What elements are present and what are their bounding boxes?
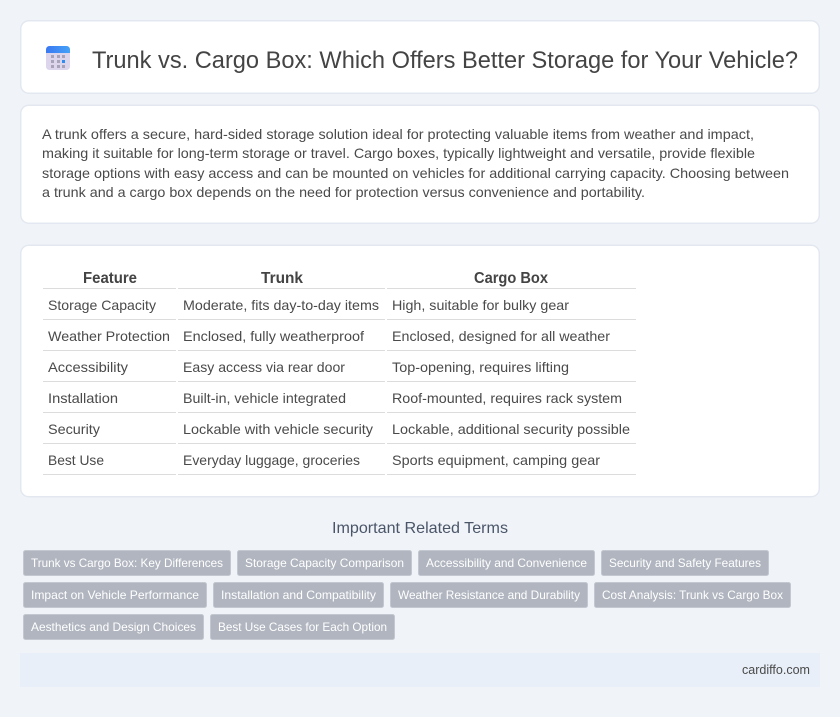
- tag: Impact on Vehicle Performance: [31, 588, 199, 602]
- tag: Storage Capacity Comparison: [245, 556, 404, 570]
- table header: Trunk: [261, 270, 303, 287]
- text block: introduction: A trunk offers a secure, hard-sided storage solution ideal for protecting valuable items from weather and impact,: [42, 126, 754, 142]
- row: storage capacity: High, suitable for bulky gear: [392, 297, 569, 313]
- table header: Cargo Box: [474, 270, 548, 287]
- tag: [594, 582, 790, 608]
- tag: Accessibility and Convenience: [426, 556, 587, 570]
- panel: header: [21, 21, 819, 93]
- row: storage capacity: Storage Capacity: [48, 297, 156, 313]
- tag: [418, 550, 594, 576]
- tag: [214, 582, 384, 608]
- tag: [24, 614, 204, 640]
- row: best use: Best Use: [48, 452, 104, 468]
- icon: calendar: [46, 46, 70, 70]
- text block: introduction: [42, 126, 789, 200]
- text block: introduction: storage options with easy access and can be mounted on vehicles for additional carrying capacity. Choosing between: [42, 165, 789, 181]
- tag: [24, 550, 230, 576]
- row: installation: Installation: [48, 390, 118, 406]
- text block: introduction: making it suitable for long-term storage or travel. Cargo boxes, typically lightweight and versatile, provide flexible: [42, 145, 755, 161]
- row: storage capacity: [48, 297, 569, 313]
- row: installation: [48, 390, 622, 406]
- row: accessibility: [48, 359, 569, 375]
- row: accessibility: Accessibility: [48, 359, 128, 375]
- title: Trunk vs. Cargo Box: Which Offers Better Storage for Your Vehicle?: [92, 47, 798, 74]
- table header: Feature: [83, 270, 137, 287]
- row: accessibility: Easy access via rear door: [183, 359, 345, 375]
- row: best use: Sports equipment, camping gear: [392, 452, 600, 468]
- row: accessibility: Top-opening, requires lifting: [392, 359, 569, 375]
- tag: Best Use Cases for Each Option: [218, 620, 387, 634]
- table header: [83, 270, 548, 287]
- row: weather protection: Enclosed, designed for all weather: [392, 328, 610, 344]
- row: security: Lockable with vehicle security: [183, 421, 373, 437]
- text block: introduction: a trunk and a cargo box depends on the need for protection versus convenience and portability.: [42, 184, 645, 200]
- row: weather protection: Enclosed, fully weatherproof: [183, 328, 364, 344]
- tag: [602, 550, 768, 576]
- tag: [210, 614, 394, 640]
- tag: Security and Safety Features: [609, 556, 761, 570]
- panel: comparison table: [21, 245, 819, 497]
- row: best use: [48, 452, 600, 468]
- tag: Aesthetics and Design Choices: [31, 620, 196, 634]
- panel: introduction: [21, 105, 819, 223]
- row: security: [48, 421, 630, 437]
- row: installation: Built-in, vehicle integrated: [183, 390, 346, 406]
- tag: Cost Analysis: Trunk vs Cargo Box: [602, 588, 783, 602]
- row: security: Lockable, additional security possible: [392, 421, 630, 437]
- tag: Installation and Compatibility: [221, 588, 376, 602]
- row: weather protection: Weather Protection: [48, 328, 170, 344]
- tag: [238, 550, 412, 576]
- footer: cardiffo.com: [742, 663, 810, 677]
- heading: important related terms: Important Related Terms: [332, 520, 508, 537]
- related term tags: [24, 550, 790, 640]
- tag: Weather Resistance and Durability: [398, 588, 580, 602]
- tag: [390, 582, 588, 608]
- row: weather protection: [48, 328, 610, 344]
- row: installation: Roof-mounted, requires rack system: [392, 390, 622, 406]
- tag: [24, 582, 206, 608]
- row: security: Security: [48, 421, 100, 437]
- tag: Trunk vs Cargo Box: Key Differences: [31, 556, 223, 570]
- footer: [20, 653, 820, 687]
- row: best use: Everyday luggage, groceries: [183, 452, 360, 468]
- row: storage capacity: Moderate, fits day-to-day items: [183, 297, 379, 313]
